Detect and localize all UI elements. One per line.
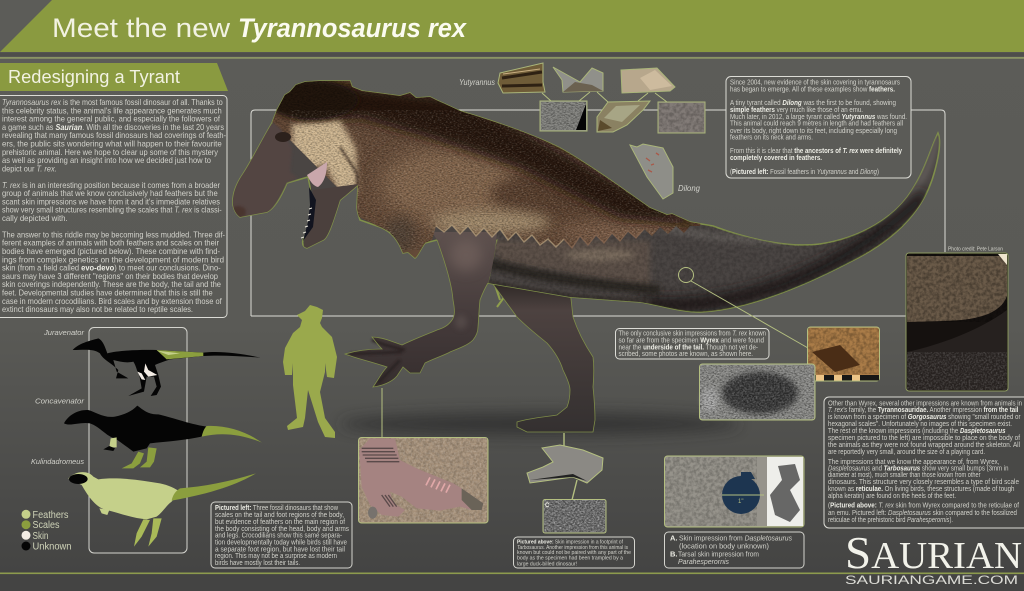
panel: pictured left caption: birds have mostly lost their tails. [215,560,300,567]
panel: pictured left caption [211,502,352,568]
photo: Wyrex skin in rock [808,327,880,381]
feather fossil connectors [542,92,667,102]
photo: Daspletosaurus skin and Parahesperornis [664,456,804,527]
text: skin impressions: The only conclusive skin impressions from T. rex known [618,330,766,338]
panel: intro text [0,96,227,318]
panel: intro text: ers, the public sits wondering what will happen to their favourite [2,138,222,148]
panel: intro text: feet. Developmental studies have determined that this is still the [2,288,213,298]
panel: intro text: this celebrity status, the animal's life appearance generates much [2,105,222,115]
panel: A and B caption: B. [670,550,678,558]
panel: intro text: skin coverings independently. These are the body, the tail and the [2,279,221,289]
panel: feather evidence: feathers on its neck and arms. [730,134,813,142]
photo: feather fossil 1 [498,63,545,93]
panel: intro text: depict our T. rex. [2,163,57,173]
tail and belly shading [470,136,940,325]
panel: intro text: interest among the general public, and especially the followers of [2,114,221,124]
panel: intro text: prehistoric animal. Here we hope to clear up some of this mystery [2,147,219,157]
photo: large skin and emu comparison [906,253,1008,391]
panel: intro text: case in modern crocodilians. Bird scales and by extension those of [2,296,222,306]
panel: feather evidence [726,76,911,178]
text: skin impressions: so far are from the specimen Wyrex and were found [618,337,764,344]
neck cream [292,120,358,196]
logo: Saurian: SAURIAN [845,527,1022,578]
silhouette: Juravenator [73,338,261,396]
text: skin impressions: scribed, some photos are known, as shown here. [618,351,753,358]
photo: footprint skin close-up: C [545,503,550,509]
panel: A and B caption [664,532,804,568]
photo: footprint rock [527,445,603,483]
panel: intro text: The answer to this riddle may be becoming less muddled. Three dif- [2,229,225,239]
ground shadow [340,412,740,436]
panel: intro text: ferent examples of animals with both feathers and scales on their [2,238,219,248]
panel: other impressions: The rest of the known impressions (including the Daspletosaurus [828,428,1006,435]
connector: footprint [564,433,577,500]
panel: intro text: as well as providing an insight into how we decided just how to [2,155,211,165]
panel: intro text: cally depicted with. [2,213,68,223]
human scale silhouette [283,305,337,438]
silhouette: Concavenator [64,406,262,468]
main frame line [251,110,945,316]
panel: intro text: show very small structures resembling the scales that T. rex is classi- [2,205,222,215]
panel: feather evidence: From this it is clear that the ancestors of T. rex were definitely [730,148,902,155]
silhouette: Kulindadromeus [68,472,256,547]
photo: Daspletosaurus skin and Parahesperornis: 1" [738,499,743,505]
panel: pictured above caption: body as the specimen had been trampled by a [517,556,623,562]
panel: pictured above caption: Pictured above: Skin impression in a footprint of [517,540,624,546]
panel: other impressions: reticulae of the prehistoric bird Parahesperornis). [828,517,953,524]
panel: feather evidence: has began to emerge. All of these examples show feathers. [730,86,895,94]
photo: Wyrex skin close-up [700,364,815,420]
section heading: Redesigning a Tyrant [0,63,228,91]
text: skin impressions [616,328,769,359]
panel: feather evidence: simple feathers very much like those of an emu. [730,107,863,114]
panel: intro text: bodies have emerged (pictured below). These combine with find- [2,246,220,256]
panel: other impressions: alpha keratin) are found on the heels of the feet. [828,493,956,500]
panel: feather evidence: completely covered in feathers. [730,155,822,162]
bottom rule [0,572,1024,574]
photo: feather fossil 6 [658,102,705,133]
photo credit: Photo credit: Pete Larson [948,246,1003,252]
panel: pictured above caption: Tarbosaurus. Another impression from this animal is [517,545,628,551]
panel: feather evidence: (Pictured left: Fossil feathers in Yutyrannus and Dilong) [730,169,879,176]
panel: intro text: revealing that many famous fossil dinosaurs had coverings of feath- [2,130,226,140]
panel: pictured left caption: region. This may not be a surprise as modern [215,553,337,560]
photo: Dilong fossil [630,144,673,199]
legend: Scales [32,520,60,531]
panel: A and B caption: Skin impression from Daspletosaurus [679,534,792,542]
section heading: Redesigning a Tyrant: Redesigning a Tyrant [8,66,180,87]
panel: intro text: scant skin impressions we have from it and it's immediate relatives [2,196,220,206]
panel: intro text: T. rex is in an interesting position because it comes from a broader [2,180,220,190]
throat tissue [307,162,327,187]
body silhouette [233,81,939,312]
panel: feather evidence: Much later, in 2012, a large tyrant called Yutyrannus was found. [730,114,907,121]
panel: other impressions: an emu. Pictured left: Daspletosaurus skin compared to the fossilized [828,510,1017,517]
near leg [345,232,497,387]
panel: intro text: saurs may have 3 different "regions" on their bodies that develop [2,271,218,281]
near leg outline [345,240,488,387]
panel: other impressions [824,397,1024,528]
fringe highlights [436,225,564,247]
panel: pictured left caption: Pictured left: Three fossil dinosaurs that show [215,505,339,512]
panel: pictured left caption: but evidence of feathers on the main region of [215,519,345,526]
mouth interior [303,187,316,241]
legend: Unknown [32,542,72,552]
feathered body [232,81,700,258]
photo: feather fossil 4 [540,101,587,131]
photo: feather fossil 2 [553,67,603,92]
label: Juravenator: Juravenator [43,328,85,337]
panel: intro text: group of animals that we know conclusively had feathers but the [2,188,218,198]
panel: A and B caption: (location on body unknown) [679,542,769,550]
photo: emu foot [358,438,488,523]
panel: other impressions: diameter at most), much smaller than those known from other [828,472,981,479]
title: Meet the new [52,13,231,43]
label: Kulindadromeus: Kulindadromeus [31,457,84,466]
panel: pictured left caption: scales on the tail and foot regions of the body, [215,512,344,519]
panel: feather evidence: Since 2004, new evidence of the skin covering in tyrannosaurs [730,80,900,86]
panel: other impressions: The impressions that we know the appearance of, from Wyrex, [828,459,1000,466]
panel: intro text: a game such as Saurian. With all the discoveries in the last 20 years [2,122,224,132]
panel: pictured above caption: large duck-billed dinosaur! [517,561,577,567]
far leg [490,280,595,432]
panel: pictured above caption: known but could not be paired with any part of the [517,550,631,556]
panel: intro text: skin (from a field called evo-devo) to meet our conclusions. Dino- [2,263,221,273]
panel: pictured above caption [514,537,634,568]
photo: feather fossil 5 [597,101,650,132]
panel: feather evidence: over its body, right down to its feet, including especially long [730,128,897,135]
panel: pictured left caption: the body consisting of the head, body and arms [215,526,349,533]
panel: A and B caption: A. [670,534,678,542]
photo: footprint skin close-up [543,500,606,533]
panel: A and B caption: Tarsal skin impression from [678,550,759,558]
connector: foot to photo [381,388,383,437]
panel: pictured left caption: tion developmentally today while birds still have [215,540,347,546]
label: Yutyrannus: Yutyrannus [459,77,496,87]
panel: feather evidence: This animal could reach 9 metres in length and had feathers all [730,120,903,128]
legend: Feathers [32,510,68,521]
label: Dilong: Dilong [678,183,700,193]
connector: tail marker to photos [691,281,808,348]
legend [22,510,72,552]
panel: intro text: extinct dinosaurs may also not be related to reptile scales. [2,304,193,314]
photo: feather fossil 3 [621,68,675,93]
panel: A and B caption: Parahesperornis [678,557,729,566]
illustration: Tyrannosaurus rex [225,60,940,432]
panel: intro text: ings from complex genetics on the development of modern bird [2,254,224,264]
panel: other impressions: T. rex's family, the Tyrannosauridae. Another impression from the tail [828,407,1019,414]
logo: Saurian: SAURIANGAME.COM [845,573,1018,587]
panel: other impressions: Daspletosaurus and Tarbosaurus show very small bumps (3mm in [828,466,1009,472]
lower jaw [303,184,358,250]
panel: feather evidence: A tiny tyrant called Dilong was the first to be found, showing [730,100,896,107]
teeth [301,208,312,238]
legend: Skin [32,531,48,542]
panel: other impressions: are reportedly very small, around the size of a playing card. [828,449,985,456]
title emphasis: Tyrannosaurus rex [238,13,467,43]
panel: pictured left caption: a separate foot region, but have lost their tail [215,546,345,554]
panel: pictured left caption: and legs. Crocodilians show this same separa- [215,532,343,540]
head [232,122,298,217]
title banner [0,0,1024,59]
text: skin impressions: near the underside of the tail. Though not yet de- [618,344,759,351]
frame: fossil silhouettes [89,328,187,553]
label: Concavenator: Concavenator [35,396,85,406]
panel: intro text: Tyrannosaurus rex is the most famous fossil dinosaur of all. Thanks to [2,97,223,107]
tail skin marker [678,268,694,282]
